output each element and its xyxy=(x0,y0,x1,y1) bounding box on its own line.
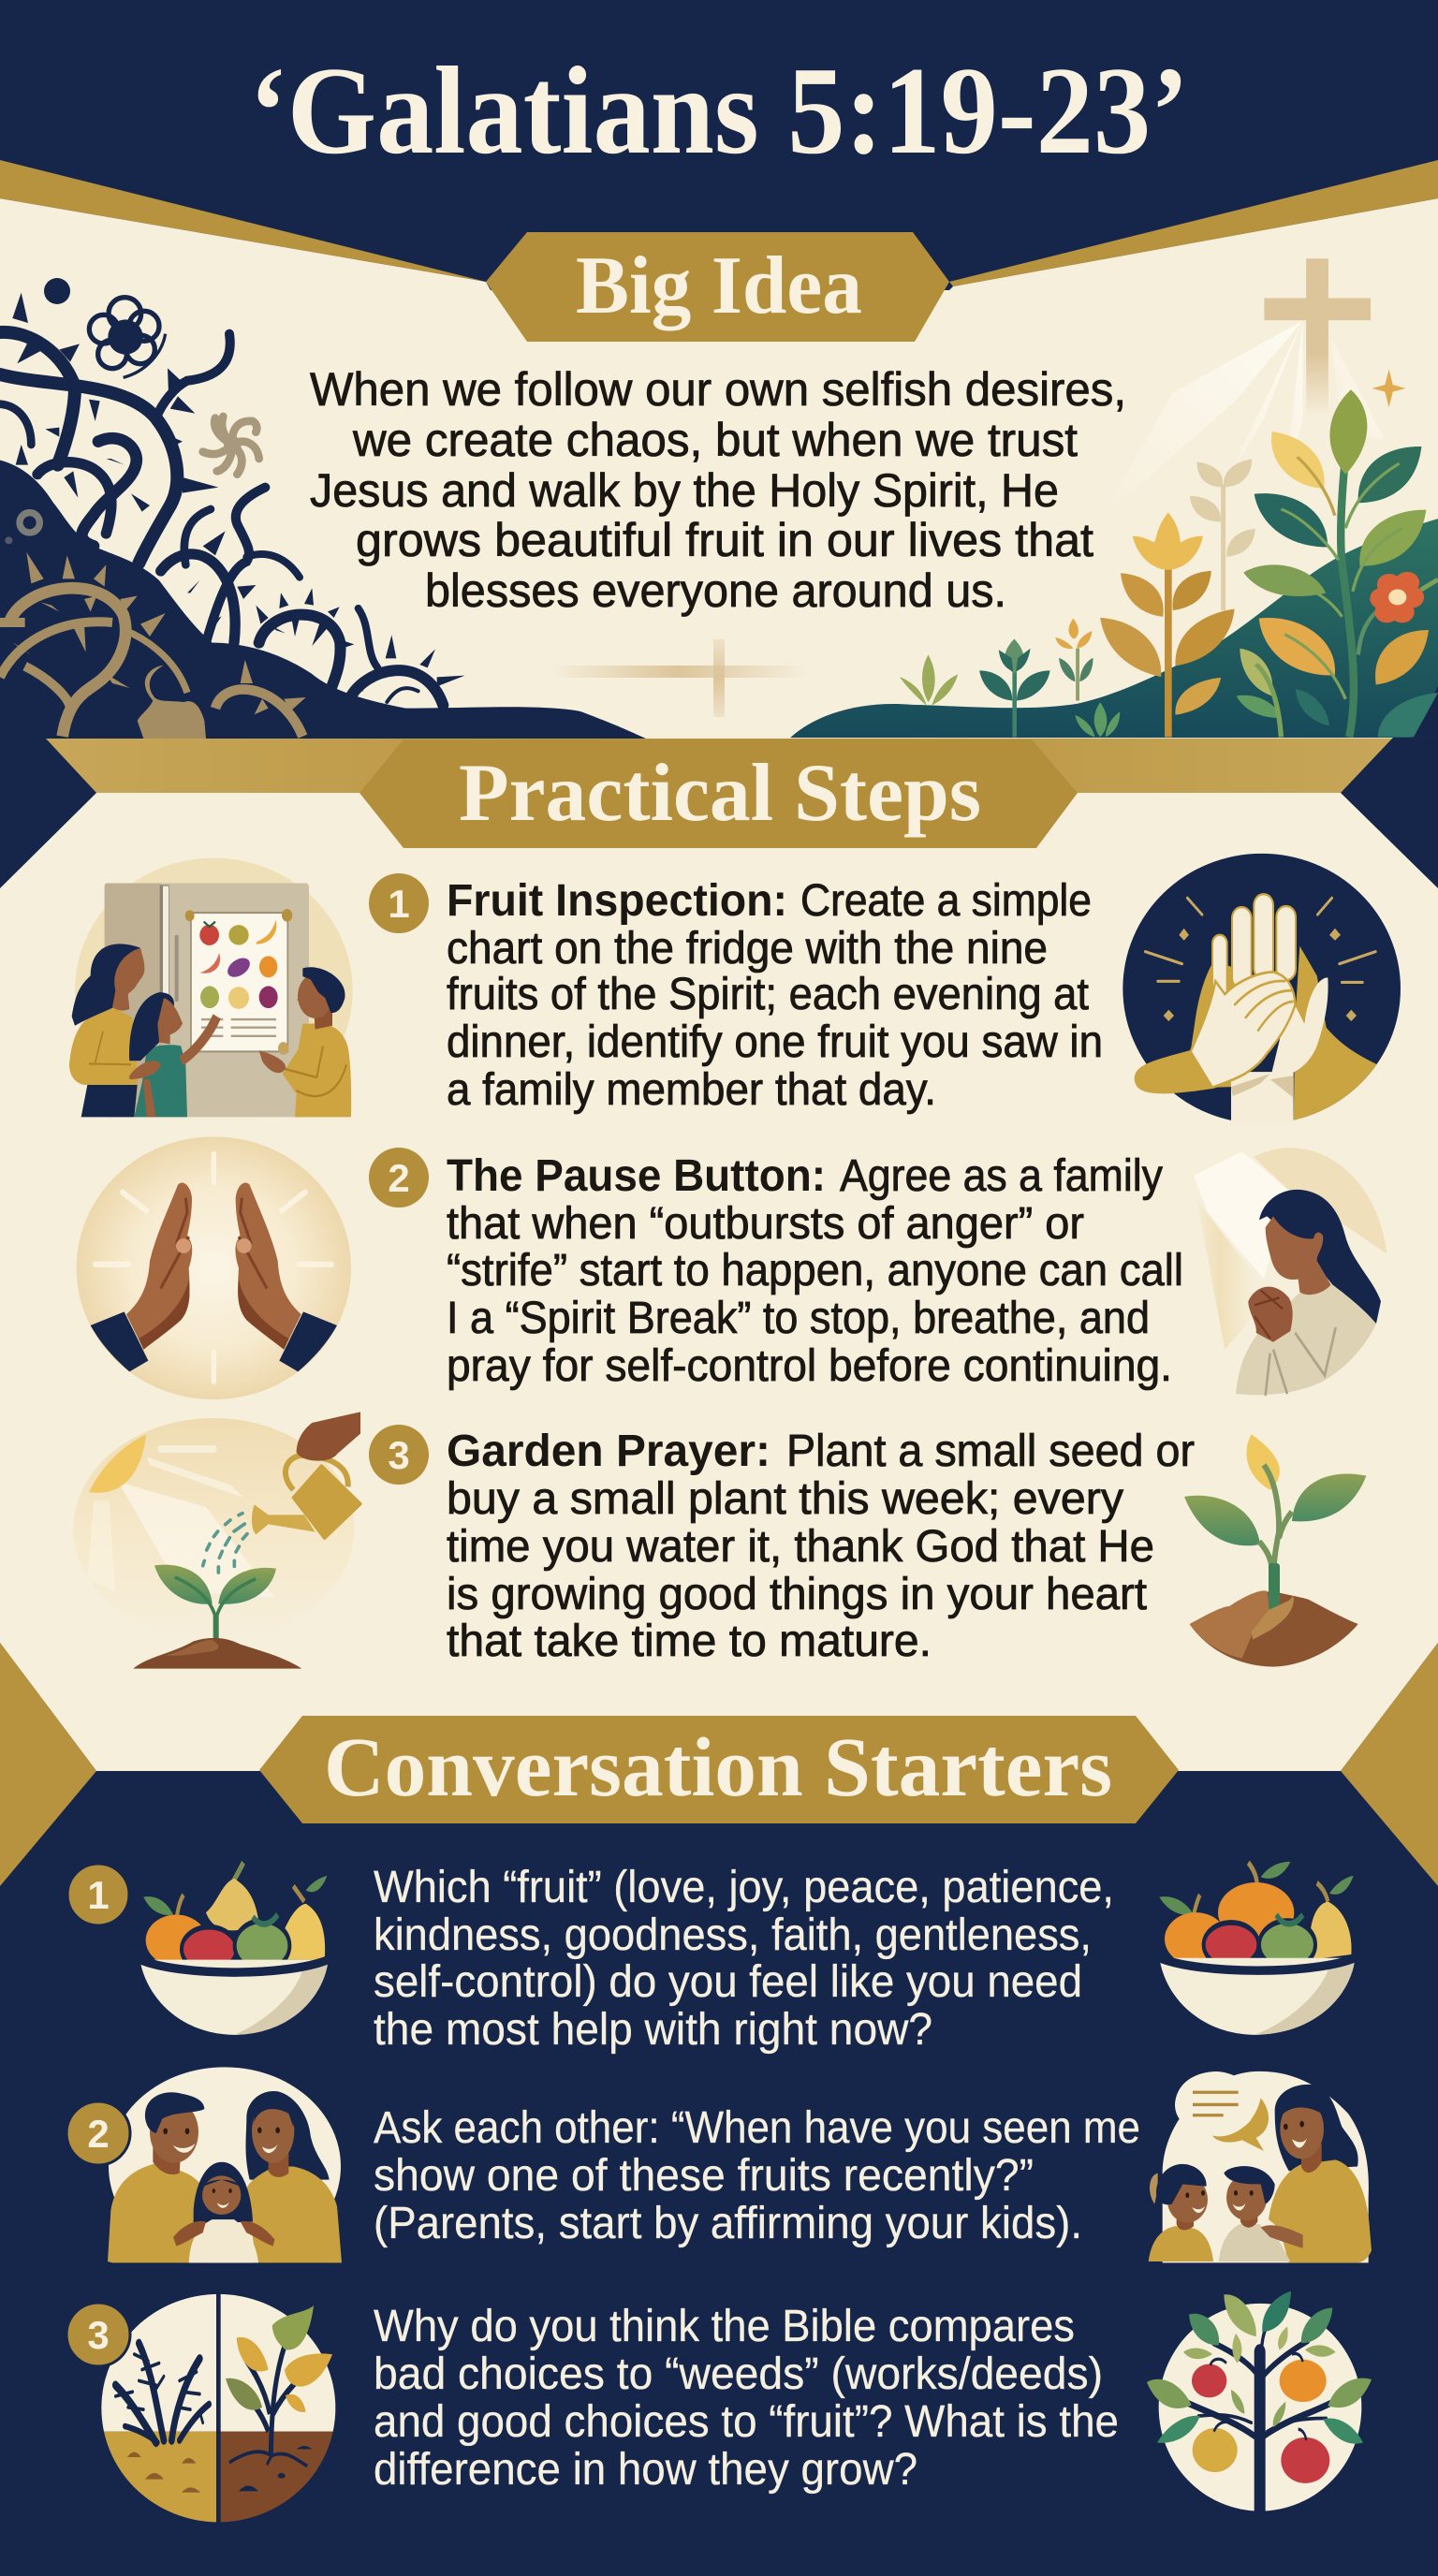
conversation 1 text: self-control) do you feel like you need xyxy=(374,1957,1082,2007)
speech bubbles xyxy=(1175,2071,1269,2151)
big idea text: we create chaos, but when we trust xyxy=(352,414,1078,466)
conversation 3 text: and good choices to “fruit”? What is the xyxy=(374,2397,1119,2447)
conversation 1 text: the most help with right now? xyxy=(374,2005,932,2055)
hill xyxy=(790,519,1438,738)
illustration: hands stopping xyxy=(77,1136,351,1399)
big idea text: Jesus and walk by the Holy Spirit, He xyxy=(310,464,1059,517)
conversation 3 text xyxy=(374,2302,1119,2495)
conversation 1 text xyxy=(374,1863,1114,2055)
step 2 text: that when “outbursts of anger” or xyxy=(447,1199,1084,1249)
left sleeve xyxy=(1135,1049,1212,1093)
big idea text: grows beautiful fruit in our lives that xyxy=(356,514,1093,566)
tan thorn rings xyxy=(0,588,302,737)
illustration: sprout in soil xyxy=(1184,1434,1366,1667)
step 2 text: The Pause Button: xyxy=(447,1151,826,1201)
orange flower xyxy=(1370,572,1424,622)
illustration: mother talking with children xyxy=(1149,2071,1372,2262)
badge 1, conversation xyxy=(67,1864,129,1925)
conversation 2 text xyxy=(374,2103,1140,2248)
step 1 text: fruits of the Spirit; each evening at xyxy=(447,970,1089,1019)
badge 2, conversation: 2 xyxy=(87,2112,110,2156)
father xyxy=(259,967,351,1117)
fridge xyxy=(105,883,309,1117)
badge 3: 3 xyxy=(388,1433,410,1477)
big idea text xyxy=(310,363,1126,617)
heading banner: Conversation Starters: Conversation Starters xyxy=(324,1721,1112,1814)
seedling and soil xyxy=(133,1565,301,1669)
badge 2, conversation xyxy=(66,2101,130,2165)
heading banner: Practical Steps: Practical Steps xyxy=(459,748,981,839)
fruit chart xyxy=(185,909,292,1055)
conversation 1 text: Which “fruit” (love, joy, peace, patience, xyxy=(374,1863,1114,1912)
child xyxy=(129,992,217,1117)
illustration: thorns and chaos xyxy=(0,278,646,739)
step 3 text: that take time to mature. xyxy=(447,1617,932,1666)
step 1 text: chart on the fridge with the nine xyxy=(447,924,1048,973)
badge 2: 2 xyxy=(388,1156,410,1200)
illustration: family at fridge chart xyxy=(69,858,353,1123)
heading banner: Practical Steps xyxy=(360,739,1078,848)
conversation 3 text: difference in how they grow? xyxy=(374,2445,917,2495)
girl xyxy=(1149,2164,1213,2261)
step 2 text: pray for self-control before continuing. xyxy=(447,1341,1172,1391)
faint centre cross xyxy=(550,639,807,717)
step 2 text: Agree as a family xyxy=(840,1151,1163,1201)
step 1 text: Fruit Inspection: xyxy=(447,876,787,926)
watering can and hand xyxy=(252,1412,360,1538)
step 3 text: buy a small plant this week; every xyxy=(447,1474,1123,1524)
icon: knot xyxy=(44,278,166,377)
sparkle xyxy=(1372,370,1406,407)
icon: small gear xyxy=(5,513,39,544)
light rays xyxy=(1098,321,1385,534)
badge 2 xyxy=(369,1148,429,1208)
illustration: right fruit bowl xyxy=(1159,1862,1355,2035)
step 3 text: time you water it, thank God that He xyxy=(447,1522,1154,1572)
conversation 2 text: Ask each other: “When have you seen me xyxy=(374,2103,1140,2153)
step 1 text xyxy=(447,876,1103,1115)
illustration: fruit tree xyxy=(1147,2291,1372,2511)
badge 3, conversation: 3 xyxy=(87,2313,110,2357)
conversation 2 text: show one of these fruits recently?” xyxy=(374,2151,1034,2201)
heading banner: Big Idea xyxy=(486,232,949,342)
mother xyxy=(1269,2085,1372,2262)
step 3 text xyxy=(447,1427,1195,1666)
illustration: hands held up in blessing xyxy=(1123,854,1401,1127)
step number badges xyxy=(369,873,429,1485)
heading banner: Big Idea: Big Idea xyxy=(576,241,862,331)
icon: swirl xyxy=(203,417,259,475)
badge 3 xyxy=(369,1425,429,1485)
badge 3, conversation xyxy=(66,2303,130,2366)
step 2 text xyxy=(447,1151,1183,1391)
illustration: woman praying in light xyxy=(1194,1146,1388,1396)
badge 1: 1 xyxy=(388,882,410,926)
step 3 text: Plant a small seed or xyxy=(786,1427,1195,1476)
beige plant xyxy=(1190,460,1255,610)
water drops xyxy=(203,1514,247,1573)
boy xyxy=(1219,2166,1303,2261)
leaves xyxy=(1147,2291,1372,2444)
cross xyxy=(1264,258,1371,417)
fruit xyxy=(1192,2353,1329,2483)
large leafy plant xyxy=(1237,389,1438,737)
step 2 text: I a “Spirit Break” to stop, breathe, and xyxy=(447,1294,1150,1343)
illustration: watering seedling in sunlight xyxy=(73,1412,360,1669)
title: ‘Galatians 5:19-23’ xyxy=(249,41,1189,180)
big idea text: blesses everyone around us. xyxy=(425,564,1006,617)
conversation 3 text: Why do you think the Bible compares xyxy=(374,2302,1075,2351)
step 3 text: Garden Prayer: xyxy=(447,1427,770,1476)
illustration: family smiling xyxy=(108,2067,342,2266)
illustration: weeds versus fruitful plant xyxy=(100,2292,337,2525)
child xyxy=(173,2162,274,2262)
illustration: cross and growing plants xyxy=(790,258,1438,738)
step 1 text: a family member that day. xyxy=(447,1065,936,1115)
big idea text: When we follow our own selfish desires, xyxy=(310,363,1126,416)
illustration: left fruit bowl xyxy=(139,1863,329,2035)
healthy plant xyxy=(226,2305,332,2491)
gold tulip plant xyxy=(1100,512,1235,737)
mother xyxy=(245,2091,342,2262)
conversation 2 text: (Parents, start by affirming your kids). xyxy=(374,2199,1082,2248)
small seedlings xyxy=(900,619,1120,737)
father xyxy=(108,2092,206,2262)
conversation 1 text: kindness, goodness, faith, gentleness, xyxy=(374,1910,1092,1960)
badge 1 xyxy=(369,873,429,933)
sun xyxy=(89,1435,146,1493)
badge 1, conversation: 1 xyxy=(87,1873,110,1917)
trunk and branches xyxy=(1182,2319,1336,2511)
step 3 text: is growing good things in your heart xyxy=(447,1570,1147,1619)
icon: beetle xyxy=(138,666,206,739)
step 1 text: Create a simple xyxy=(800,876,1092,926)
conversation 3 text: bad choices to “weeds” (works/deeds) xyxy=(374,2349,1103,2399)
soil stones xyxy=(127,2452,200,2493)
thorny weeds xyxy=(115,2343,209,2442)
mother xyxy=(69,944,144,1117)
step 1 text: dinner, identify one fruit you saw in xyxy=(447,1017,1103,1067)
step 2 text: “strife” start to happen, anyone can call xyxy=(447,1246,1183,1295)
